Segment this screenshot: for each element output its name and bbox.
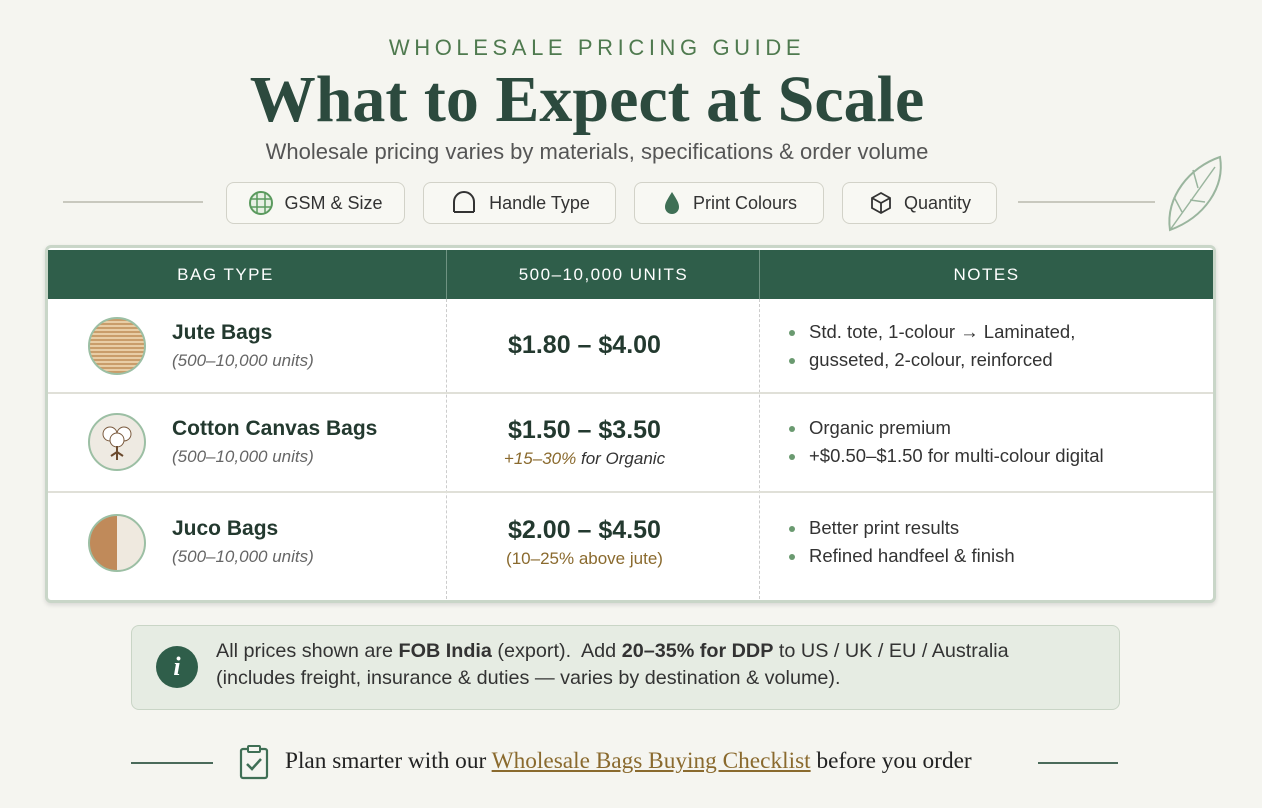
row: Cotton: Cotton Canvas Bags	[172, 417, 377, 440]
info text: (includes freight, insurance & duties — varies by destination & volume).	[216, 667, 841, 689]
footer CTA: Plan smarter with our Wholesale Bags Buying Checklist before you order	[285, 748, 972, 774]
pill: Quantity	[842, 182, 997, 224]
icon: leaf	[1168, 156, 1222, 232]
pill: Print Colours	[634, 182, 824, 224]
row: Juco: Juco Bags	[172, 517, 278, 540]
row: Jute: $1.80 – $4.00	[508, 331, 661, 359]
row: Cotton: +$0.50–$1.50 for multi-colour digital	[809, 445, 1104, 466]
icon: clipboard	[240, 745, 268, 780]
pricing table	[45, 245, 1216, 603]
table header: BAG TYPE	[177, 265, 274, 284]
row: Cotton: $1.50 – $3.50	[508, 416, 661, 444]
eyebrow heading: WHOLESALE PRICING GUIDE	[389, 35, 805, 60]
row: Jute: gusseted, 2-colour, reinforced	[809, 348, 1053, 370]
row: Jute: (500–10,000 units)	[172, 350, 314, 370]
table header: 500–10,000 UNITS	[519, 265, 688, 284]
title: What to Expect at Scale	[250, 63, 924, 136]
info callout	[131, 625, 1120, 710]
row: Cotton: (500–10,000 units)	[172, 447, 314, 466]
row: Juco	[88, 514, 1015, 572]
row: Juco: $2.00 – $4.50	[508, 516, 661, 544]
row: Juco: Better print results	[809, 517, 959, 538]
pill: GSM & Size: GSM & Size	[284, 192, 383, 212]
row: Jute: Jute Bags	[172, 320, 272, 344]
pill: Handle Type: Handle Type	[489, 192, 590, 212]
table header: NOTES	[953, 265, 1020, 284]
pill: Quantity: Quantity	[904, 192, 971, 212]
row: Jute: Std. tote, 1-colour → Laminated,	[809, 320, 1075, 342]
subtitle: Wholesale pricing varies by materials, specifications & order volume	[266, 139, 928, 164]
row: Cotton: +15–30% for Organic	[504, 448, 665, 468]
row: Juco: (500–10,000 units)	[172, 547, 314, 566]
pill: GSM & Size	[226, 182, 405, 224]
icon: info: i	[173, 652, 181, 681]
table header	[48, 250, 1213, 299]
info text: All prices shown are FOB India (export). Add 20–35% for DDP to US / UK / EU / Australia	[216, 640, 1009, 662]
pill: Handle Type	[423, 182, 616, 224]
info text	[216, 640, 1009, 689]
row: Jute	[88, 317, 1075, 375]
row: Juco: (10–25% above jute)	[506, 548, 663, 568]
row: Juco: Refined handfeel & finish	[809, 545, 1015, 566]
row: Cotton	[88, 413, 1104, 471]
icon: info	[156, 646, 198, 688]
pill: Print Colours: Print Colours	[693, 192, 797, 212]
row: Cotton: Organic premium	[809, 417, 951, 438]
